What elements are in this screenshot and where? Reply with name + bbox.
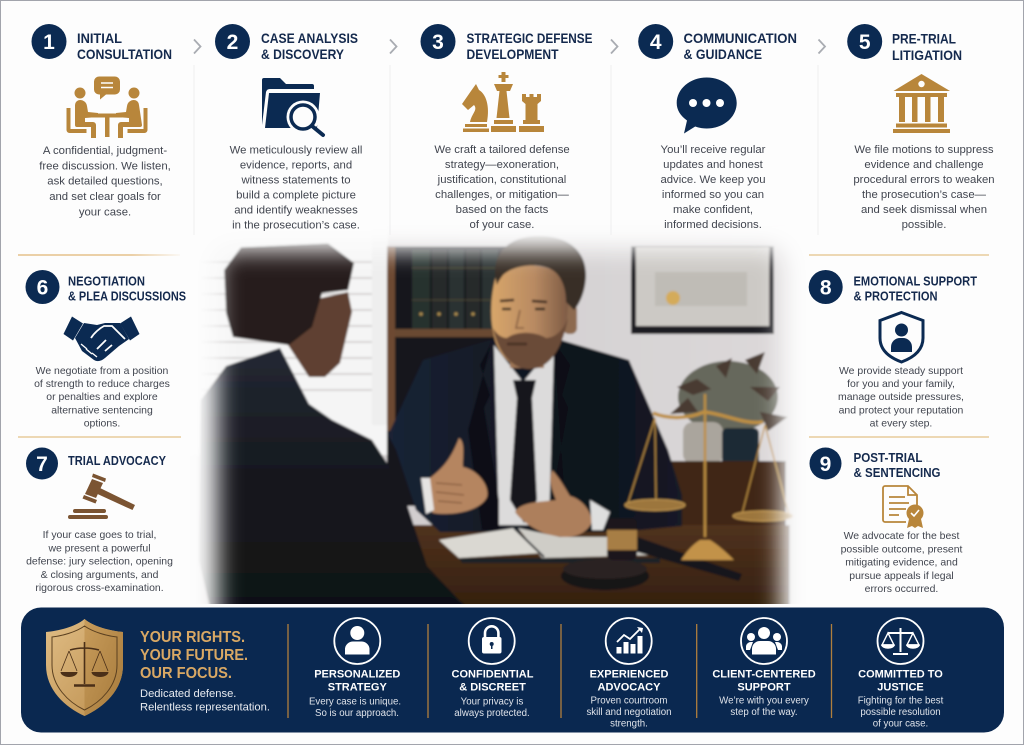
step 2 description: build a complete picture [236, 190, 356, 202]
title [712, 669, 816, 694]
step 1 heading: INITIAL [77, 30, 122, 46]
title: STRATEGY [328, 682, 388, 694]
step 4 description: make confident, [673, 204, 753, 216]
lawyer [388, 235, 682, 537]
arrow 3 to 4 [611, 40, 618, 54]
step 5 heading: LITIGATION [892, 47, 962, 63]
description [858, 696, 944, 730]
step 1 description: your case. [79, 206, 131, 218]
banner tagline: Relentless representation. [140, 702, 270, 714]
step 1 heading: CONSULTATION [77, 46, 172, 62]
step 3 heading: DEVELOPMENT [466, 46, 559, 62]
step 5 description [853, 144, 995, 231]
step 4 description: updates and honest [663, 159, 764, 171]
arrow 1 to 2 [194, 40, 200, 54]
step 8 panel [809, 270, 977, 430]
central photo: lawyer consulting client [190, 225, 810, 610]
title: CONFIDENTIAL [452, 669, 534, 681]
step 2 panel [215, 24, 362, 232]
step 3 heading: STRATEGIC DEFENSE [466, 30, 592, 46]
arrow 4 to 5 [818, 40, 825, 54]
step 4 description: advice. We keep you [660, 174, 766, 186]
step 4 heading [684, 30, 797, 62]
icon: speech bubble [677, 78, 737, 134]
step 7 heading: TRIAL ADVOCACY [68, 453, 166, 468]
open document folder [439, 528, 660, 563]
step 1 description: ask detailed questions, [47, 176, 163, 188]
step 9 panel [810, 448, 963, 595]
step 9 description: We advocate for the best [844, 531, 960, 542]
step 8 description [838, 366, 964, 430]
step 3 description: justification, constitutional [437, 174, 566, 186]
step 8 description: and protect your reputation [839, 406, 964, 416]
step 3 panel [420, 24, 592, 231]
icon: group of people [741, 618, 787, 664]
step 5 heading: PRE-TRIAL [892, 30, 956, 46]
title: PERSONALIZED [314, 669, 400, 681]
step 6 description: options. [84, 418, 120, 430]
title: COMMITTED TO [858, 669, 943, 681]
step 5 description: evidence and challenge [864, 159, 984, 171]
lawyer right hand [515, 470, 592, 537]
description [454, 696, 530, 719]
step 6 description: or penalties and explore [46, 392, 158, 403]
step 2 description: and identify weaknesses [234, 204, 358, 216]
step 8 description: for you and your family, [847, 379, 955, 390]
step 7 description [26, 530, 173, 594]
step 2 description [230, 144, 362, 232]
step 5 description: We file motions to suppress [854, 144, 994, 156]
step 4 description [660, 144, 766, 231]
step 3 description: based on the facts [456, 204, 549, 216]
step 6 heading: NEGOTIATION [68, 274, 145, 289]
value: experienced advocacy [586, 618, 672, 730]
step 9 badge [810, 448, 842, 480]
step 6 heading: & PLEA DISCUSSIONS [68, 288, 186, 304]
description: Proven courtroom [590, 696, 668, 706]
value: committed to justice [858, 618, 944, 730]
step 1 heading [77, 30, 172, 62]
step 7 description: rigorous cross-examination. [35, 583, 164, 594]
banner headline [140, 629, 248, 682]
step 8 heading: EMOTIONAL SUPPORT [854, 274, 977, 289]
lawyer head [491, 235, 586, 369]
banner tagline: Dedicated defense. [140, 688, 236, 700]
step 8 badge [809, 270, 843, 304]
title [314, 669, 400, 694]
step 7 description: If your case goes to trial, [43, 530, 156, 541]
step 4 description: informed decisions. [664, 219, 762, 231]
step 2 description: evidence, reports, and [240, 160, 352, 172]
brass scales [625, 394, 793, 560]
step 1 description: and set clear goals for [49, 191, 161, 203]
step 3 description [434, 144, 570, 231]
step 1 description [39, 145, 171, 218]
plant and vases [670, 352, 788, 468]
description [586, 696, 672, 730]
framed diploma [631, 246, 774, 334]
icon: certified document [883, 486, 924, 528]
step 9 heading [854, 450, 940, 480]
step 4 description: informed so you can [662, 189, 764, 201]
step 4 badge: 4 [650, 31, 662, 54]
step 5 heading [892, 30, 962, 63]
step 2 badge [215, 24, 250, 59]
sideboard [668, 461, 786, 531]
icon: padlock [469, 618, 515, 664]
step 8 description: We provide steady support [839, 366, 963, 377]
step 3 description: challenges, or mitigation— [435, 189, 569, 201]
step 7 panel [26, 448, 173, 594]
step 2 heading: & DISCOVERY [261, 46, 345, 62]
step 1 description: A confidential, judgment- [43, 145, 167, 157]
step 8 heading [854, 274, 977, 304]
step 4 description: You’ll receive regular [661, 144, 766, 156]
step 3 description: strategy—exoneration, [445, 159, 559, 171]
step 6 badge [26, 270, 60, 304]
title: ADVOCACY [598, 682, 661, 694]
step 2 heading [261, 30, 358, 62]
step 8 heading: & PROTECTION [854, 288, 938, 304]
icon: rising chart [606, 618, 652, 664]
title: SUPPORT [737, 682, 791, 694]
step 6 badge: 6 [37, 276, 48, 300]
description: strength. [610, 718, 648, 730]
value: client-centered support [712, 618, 816, 718]
description [719, 696, 809, 718]
description: Your privacy is [461, 696, 523, 707]
step 2 description: in the prosecution’s case. [232, 220, 360, 232]
icon: chess pieces [462, 72, 544, 132]
step 8 description: manage outside pressures, [838, 392, 964, 403]
step 9 heading: POST-TRIAL [854, 450, 923, 465]
step 4 panel [638, 24, 797, 231]
step 1 panel [32, 24, 172, 218]
bookcase [387, 246, 507, 506]
step 5 badge [847, 24, 882, 59]
value: personalized strategy [309, 618, 401, 719]
icon: shield with person [880, 312, 923, 362]
lawyer left hand [426, 438, 487, 514]
step 1 badge [32, 24, 66, 59]
step 6 panel [26, 270, 186, 430]
step 9 badge: 9 [820, 453, 831, 476]
step 6 description: We negotiate from a position [36, 366, 169, 377]
step 5 description: procedural errors to weaken [853, 174, 995, 186]
step 3 heading [466, 30, 592, 62]
description [309, 696, 401, 719]
step 7 description: & closing arguments, and [41, 570, 159, 581]
banner headline: YOUR RIGHTS. [140, 629, 245, 646]
description: skill and negotiation [586, 707, 672, 718]
banner headline: YOUR FUTURE. [140, 647, 248, 664]
step 7 description: we present a powerful [47, 544, 151, 554]
desk [412, 523, 790, 604]
icon: handshake [64, 316, 140, 361]
step 7 badge [26, 448, 58, 480]
step 9 description: errors occurred. [865, 584, 938, 595]
step 8 description: at every step. [870, 418, 932, 430]
step 6 description [34, 366, 170, 430]
step 4 heading: & GUIDANCE [684, 46, 762, 62]
step 5 description: and seek dismissal when [861, 204, 987, 216]
icon: folder with magnifying glass [262, 78, 323, 135]
title [590, 669, 668, 694]
step 1 badge: 1 [43, 31, 55, 54]
step 7 description: defense: jury selection, opening [26, 556, 173, 568]
title [858, 669, 943, 694]
step 3 badge: 3 [432, 31, 444, 54]
step 3 description: of your case. [470, 219, 534, 231]
icon: courthouse [893, 74, 950, 133]
step 2 badge: 2 [227, 31, 238, 54]
gavel [561, 518, 742, 590]
title: EXPERIENCED [590, 669, 668, 681]
step 9 heading: & SENTENCING [854, 465, 940, 480]
icon: gavel [68, 474, 135, 519]
description: possible resolution [860, 707, 941, 718]
arrow 2 to 3 [390, 40, 396, 54]
description: of your case. [873, 718, 928, 730]
banner headline: OUR FOCUS. [140, 665, 232, 682]
title [452, 669, 534, 694]
gold shield with scales [46, 619, 123, 716]
step 4 heading: COMMUNICATION [684, 30, 797, 46]
bottom banner [21, 608, 1004, 732]
step 9 description: pursue appeals if legal [849, 571, 954, 582]
step 9 description [841, 531, 963, 595]
step 5 panel [847, 24, 995, 231]
step 9 description: possible outcome, present [841, 544, 963, 556]
step 5 description: the prosecution’s case— [862, 189, 987, 201]
step 4 badge [638, 24, 673, 59]
description: So is our approach. [315, 708, 399, 719]
step 1 description: free discussion. We listen, [39, 160, 171, 172]
step 3 badge [420, 24, 456, 59]
value: confidential and discreet [452, 618, 534, 719]
step 7 badge: 7 [36, 453, 48, 476]
step 8 badge: 8 [820, 276, 832, 300]
step 2 description: witness statements to [240, 174, 351, 186]
description: Every case is unique. [309, 696, 401, 707]
description: step of the way. [730, 707, 798, 718]
description: Fighting for the best [858, 696, 944, 706]
icon: two people meeting at table [66, 76, 148, 138]
step 9 description: mitigating evidence, and [845, 558, 958, 568]
banner tagline [140, 688, 270, 714]
description: We’re with you every [719, 696, 809, 706]
step 6 heading [68, 274, 186, 304]
title: JUSTICE [877, 682, 924, 694]
step 2 heading: CASE ANALYSIS [261, 30, 358, 46]
icon: scales of justice [878, 618, 924, 664]
title: & DISCREET [459, 682, 526, 694]
step 5 description: possible. [902, 219, 946, 231]
step 6 description: alternative sentencing [51, 406, 153, 416]
description: always protected. [454, 708, 530, 719]
client silhouette [198, 243, 471, 610]
step 6 description: of strength to reduce charges [34, 379, 170, 390]
icon: person [334, 618, 380, 664]
step 5 badge: 5 [859, 31, 871, 54]
step 2 description: We meticulously review all [230, 144, 362, 156]
step 3 description: We craft a tailored defense [434, 144, 570, 156]
window blinds [206, 240, 389, 456]
title: CLIENT-CENTERED [712, 669, 816, 681]
